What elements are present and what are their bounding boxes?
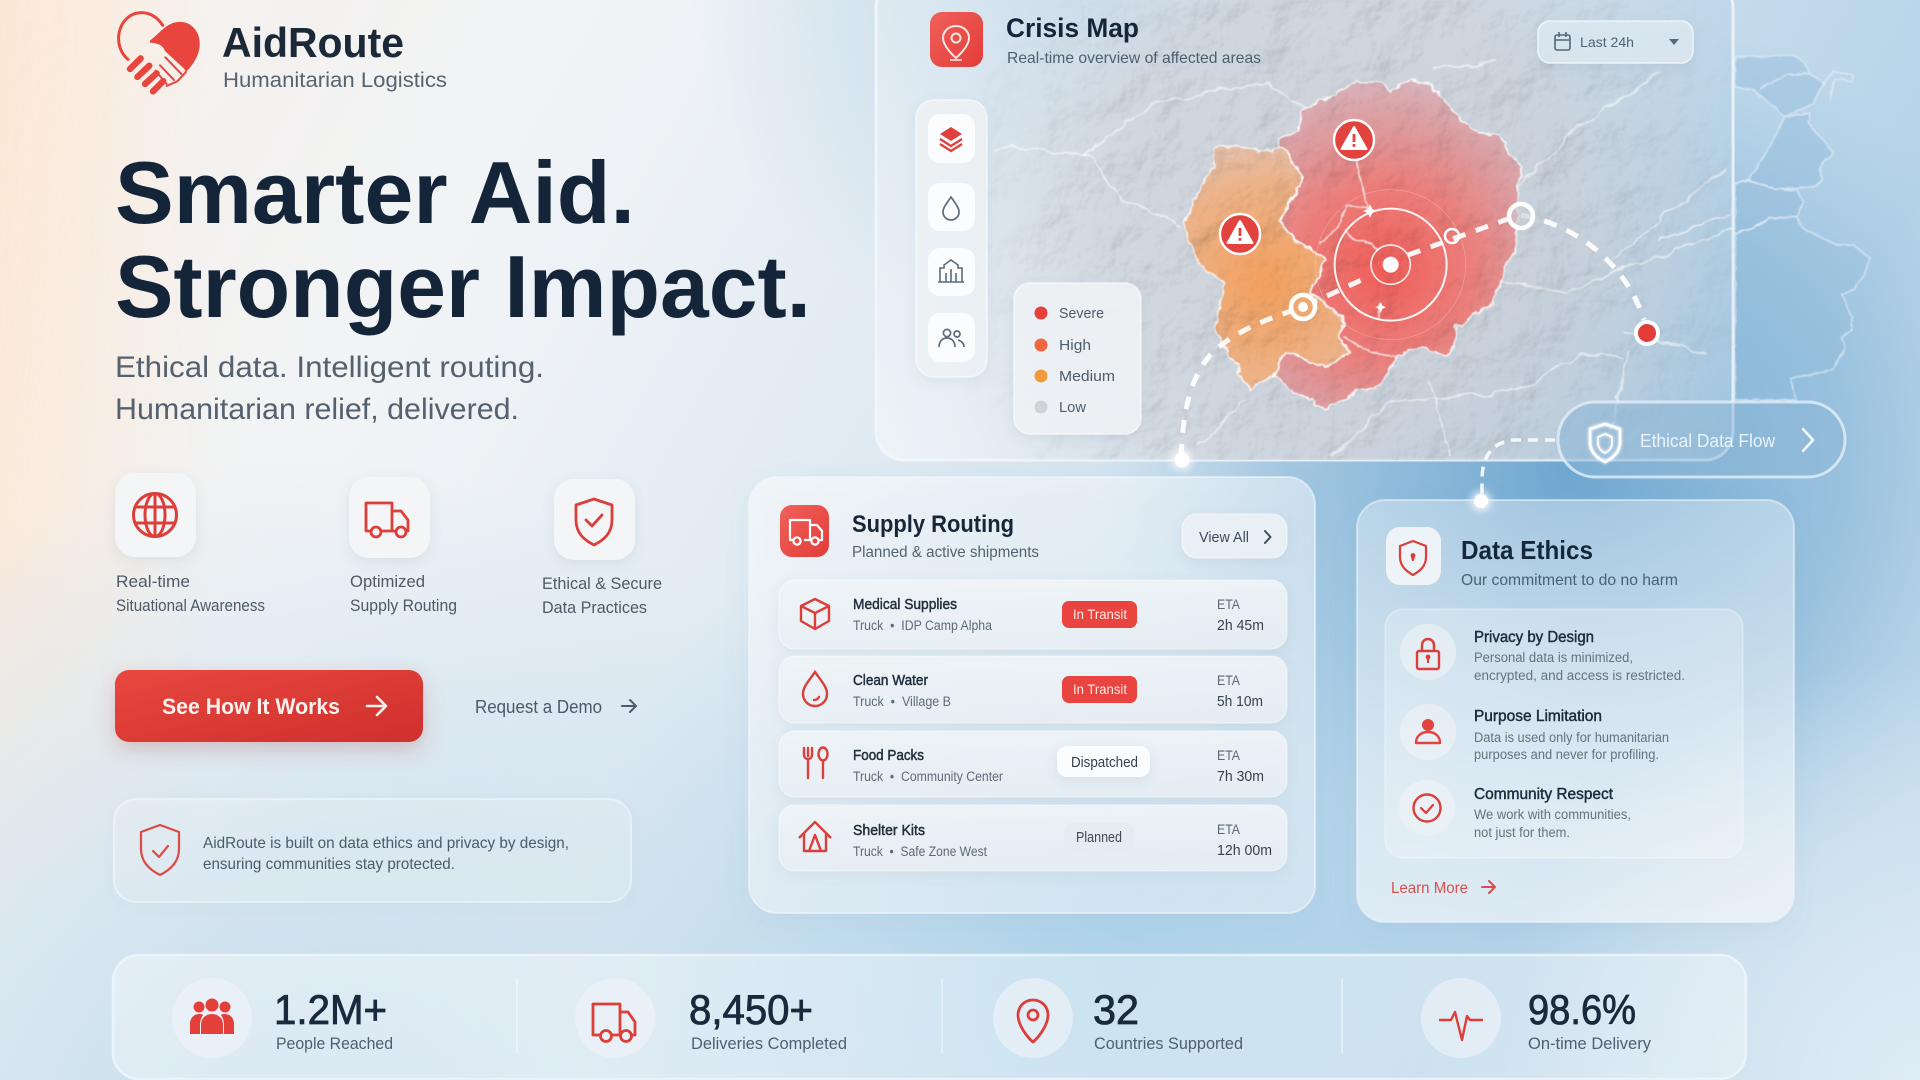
principle: privacy by design: Privacy by Design <box>1474 629 1594 646</box>
shipment row: medical supplies <box>779 580 1287 649</box>
view all button: View All <box>1199 530 1249 546</box>
route anchor dot <box>1174 452 1190 468</box>
heading: supply routing: Planned & active shipments <box>852 544 1039 561</box>
principle: privacy by design: Personal data is minimized, <box>1474 650 1633 665</box>
heading: crisis map: Real-time overview of affected areas <box>1007 50 1261 67</box>
internal region lines <box>1320 162 1510 357</box>
shipment row: clean water: ETA <box>1217 673 1240 688</box>
shipment row: food packs: ETA <box>1217 748 1240 763</box>
principle: community respect: not just for them. <box>1474 825 1570 840</box>
shipment row: clean water <box>779 656 1287 723</box>
stat: on-time delivery: 98.6% <box>1528 986 1636 1033</box>
subheading <box>115 351 544 426</box>
icon: fork and spoon <box>804 748 828 778</box>
view all button <box>1182 514 1287 558</box>
principle: privacy by design: encrypted, and access is restricted. <box>1474 668 1685 683</box>
feature: situational awareness <box>115 473 265 615</box>
principle: privacy by design <box>1400 624 1685 683</box>
shipment row: medical supplies: ETA <box>1217 597 1240 612</box>
heading: supply routing: Supply Routing <box>852 511 1014 538</box>
stat: countries supported: 32 <box>1093 986 1139 1033</box>
status badge: dispatched <box>1057 746 1150 777</box>
feature: supply routing: Optimized <box>350 572 425 591</box>
status badge: planned: Planned <box>1076 830 1122 846</box>
heading: crisis map: Crisis Map <box>1006 13 1139 43</box>
toolbar: people button <box>928 313 975 362</box>
status badge: in transit: In Transit <box>1073 681 1127 697</box>
principle: community respect: Community Respect <box>1474 786 1614 803</box>
impact zone: severe/high region <box>1275 80 1520 410</box>
ethical data flow pill <box>1558 402 1845 477</box>
icon: location pin <box>1018 1000 1048 1042</box>
map legend <box>1014 283 1141 434</box>
stat: deliveries completed: Deliveries Completed <box>691 1034 847 1053</box>
icon: shield check <box>141 825 179 875</box>
dashed delivery route <box>1181 215 1644 457</box>
principle: purpose limitation: Purpose Limitation <box>1474 708 1602 725</box>
status badge: planned <box>1064 823 1134 850</box>
map glass card <box>876 0 1733 460</box>
heading: crisis map <box>1006 13 1261 67</box>
stat: people reached: People Reached <box>276 1034 393 1053</box>
icon: shelter <box>799 822 831 851</box>
subheading: Ethical data. Intelligent routing. <box>115 351 544 384</box>
status badge: in transit: In Transit <box>1073 606 1127 622</box>
ethics note card: AidRoute is built on data ethics and privacy by design, <box>203 835 569 852</box>
headline: Smarter Aid. <box>115 143 635 242</box>
feature: supply routing: Supply Routing <box>350 596 457 615</box>
shipment row: shelter kits: Truck • Safe Zone West <box>853 844 987 859</box>
shipment row: medical supplies: Medical Supplies <box>853 597 957 613</box>
stat: on-time delivery: On-time Delivery <box>1528 1034 1651 1053</box>
status badge: dispatched: Dispatched <box>1071 755 1138 771</box>
alert marker north <box>1334 120 1374 160</box>
principles list <box>1385 609 1743 858</box>
feature: situational awareness: Situational Awareness <box>116 596 265 615</box>
logo <box>119 13 447 92</box>
map legend: Low <box>1059 399 1086 416</box>
alert marker west <box>1220 214 1260 254</box>
icon: truck tile <box>780 505 829 557</box>
stat: countries supported: Countries Supported <box>1094 1034 1243 1053</box>
principle: purpose limitation <box>1400 704 1669 762</box>
ethics note card <box>114 799 631 902</box>
map terrain base <box>1024 0 1726 460</box>
date filter dropdown <box>1538 21 1693 63</box>
shipment row: food packs <box>779 731 1287 797</box>
heading: data ethics: Our commitment to do no harm <box>1461 572 1678 589</box>
heading: supply routing <box>852 511 1039 561</box>
brand tagline: Humanitarian Logistics <box>223 69 447 92</box>
toolbar: layers button <box>928 114 975 163</box>
feature: ethical data practices: Ethical & Secure <box>542 574 662 593</box>
icon: glowing shield <box>1590 424 1620 462</box>
status badge: in transit <box>1062 676 1137 703</box>
map legend: Medium <box>1059 368 1115 385</box>
stat: deliveries completed: 8,450+ <box>689 986 813 1033</box>
shipment row: medical supplies: Truck • IDP Camp Alpha <box>853 618 992 633</box>
contour lines <box>995 60 1739 457</box>
feature: ethical data practices: Data Practices <box>542 598 647 617</box>
primary button: see how it works: See How It Works <box>162 694 340 719</box>
icon: chevron <box>1803 429 1813 451</box>
shipment row: food packs: Truck • Community Center <box>853 769 1003 784</box>
feature: ethical data practices <box>542 479 662 617</box>
ethical data flow pill: Ethical Data Flow <box>1640 431 1776 451</box>
feature: situational awareness: Real-time <box>116 572 190 591</box>
principle: purpose limitation: purposes and never for profiling. <box>1474 747 1659 762</box>
status badge: in transit <box>1062 601 1137 628</box>
shipment row: clean water: 5h 10m <box>1217 694 1263 710</box>
outer map contour lines <box>1735 55 1870 400</box>
link: request a demo: Request a Demo <box>475 697 602 717</box>
principle: purpose limitation: Data is used only for humanitarian <box>1474 730 1669 745</box>
icon: pulse <box>1439 1012 1483 1040</box>
date filter dropdown: Last 24h <box>1580 34 1634 50</box>
shipment row: food packs: Food Packs <box>853 748 924 764</box>
principle: community respect <box>1399 780 1631 840</box>
panel: crisis map <box>876 0 1739 468</box>
shipment row: shelter kits <box>779 805 1287 871</box>
ethical data flow connector <box>1474 440 1555 508</box>
shipment row: clean water: Clean Water <box>853 673 928 689</box>
shipment row: food packs: 7h 30m <box>1217 769 1264 785</box>
subheading: Humanitarian relief, delivered. <box>115 393 519 426</box>
stat: people reached: 1.2M+ <box>274 986 387 1033</box>
icon: box <box>801 599 829 629</box>
map layer toolbar <box>916 100 987 377</box>
ethics note card: ensuring communities stay protected. <box>203 856 455 873</box>
shipment row: clean water: Truck • Village B <box>853 694 951 709</box>
feature: supply routing <box>349 477 457 615</box>
heading: data ethics: Data Ethics <box>1461 535 1593 565</box>
icon: shield tile <box>1386 527 1441 585</box>
icon: arrow <box>622 700 636 712</box>
stat: countries supported <box>993 978 1243 1058</box>
icon: map pin tile <box>930 12 983 67</box>
icon: shield check <box>576 499 612 545</box>
shipment row: shelter kits: Shelter Kits <box>853 823 925 839</box>
headline: Stronger Impact. <box>115 237 811 336</box>
icon: truck <box>593 1004 635 1042</box>
toolbar: buildings button <box>928 248 975 296</box>
shipment row: shelter kits: 12h 00m <box>1217 843 1272 859</box>
headline <box>115 143 811 336</box>
shipment row: medical supplies: 2h 45m <box>1217 618 1264 634</box>
shipment row: shelter kits: ETA <box>1217 822 1240 837</box>
terrain relief <box>1031 0 1708 460</box>
route node markers <box>1291 204 1658 344</box>
stat: on-time delivery <box>1421 978 1651 1058</box>
icon: truck <box>366 503 408 537</box>
panel: data ethics <box>1357 500 1794 922</box>
stats bar <box>113 955 1746 1079</box>
panel: supply routing <box>749 477 1315 913</box>
heading: data ethics <box>1461 535 1678 589</box>
stat: people reached <box>172 978 393 1058</box>
brand name: AidRoute <box>222 19 404 66</box>
primary button: see how it works <box>115 670 423 742</box>
stat: deliveries completed <box>575 978 847 1058</box>
map legend: Severe <box>1059 305 1104 322</box>
icon: water drop <box>803 672 827 706</box>
map legend: High <box>1059 337 1091 354</box>
principle: community respect: We work with communities, <box>1474 807 1631 822</box>
icon: people <box>190 998 234 1034</box>
hazard target rings <box>1316 190 1466 340</box>
toolbar: water button <box>928 183 975 231</box>
icon: heart handshake <box>119 13 200 91</box>
icon: globe <box>134 493 176 537</box>
impact zone: medium region <box>1185 145 1350 390</box>
link: learn more: Learn More <box>1391 880 1468 897</box>
icon: arrow <box>367 697 386 715</box>
